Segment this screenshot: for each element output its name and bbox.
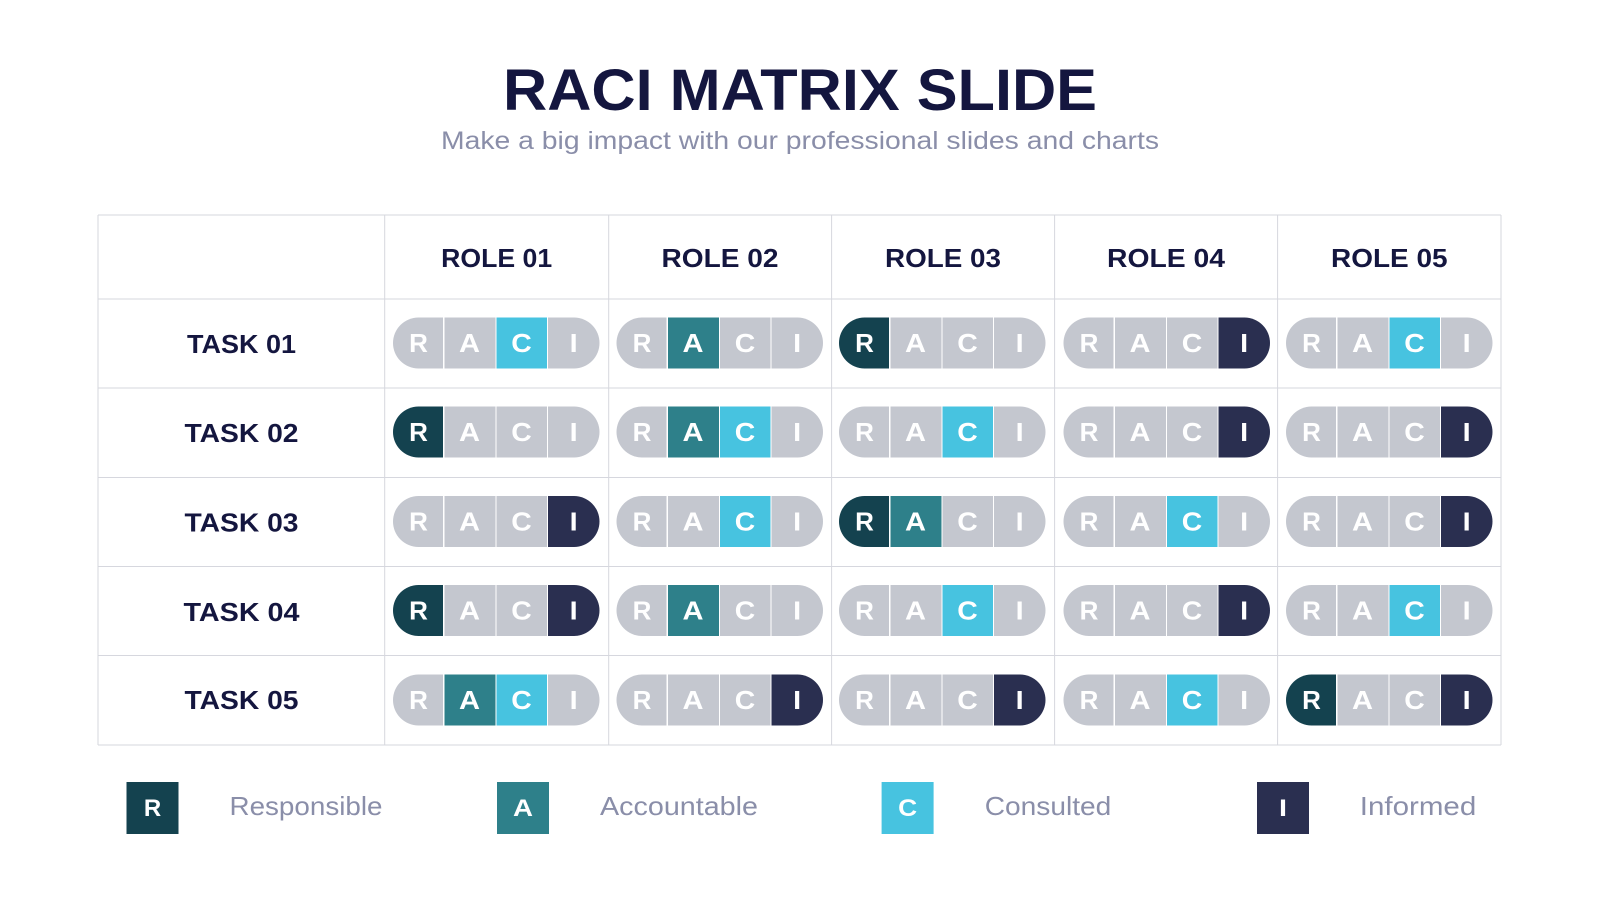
pill: task 03 role 05: C xyxy=(1404,506,1425,536)
pill: task 05 role 04: R xyxy=(1080,685,1099,715)
pill: task 05 role 03 xyxy=(839,674,1046,726)
task labels: TASK 03 xyxy=(184,508,298,538)
pill: task 01 role 02: A xyxy=(682,328,704,358)
pill: task 04 role 02: R xyxy=(633,596,652,626)
pill: task 05 role 05: A xyxy=(1352,685,1373,715)
task labels: TASK 01 xyxy=(187,329,296,359)
pill: task 03 role 03: A xyxy=(905,506,926,536)
pill: task 04 role 04: C xyxy=(1182,596,1202,626)
pill: task 01 role 01 xyxy=(393,318,600,368)
pill: task 05 role 02: R xyxy=(633,685,652,715)
pill: task 04 role 03 xyxy=(839,585,1046,636)
pill: task 05 role 03: A xyxy=(905,685,926,715)
pill: task 05 role 04: A xyxy=(1130,685,1151,715)
pill: task 05 role 05: I xyxy=(1463,685,1471,715)
pill: task 02 role 01 xyxy=(393,406,600,458)
legend: responsible xyxy=(126,782,382,834)
pill: task 02 role 04: A xyxy=(1130,417,1151,447)
pill: task 02 role 01: C xyxy=(511,417,532,447)
pill: task 03 role 04 xyxy=(1064,496,1270,547)
pill: task 02 role 03 xyxy=(839,406,1046,458)
pill: task 03 role 02: A xyxy=(682,506,704,536)
legend: consulted: Consulted xyxy=(985,791,1111,821)
pill: task 02 role 04 xyxy=(1064,406,1270,458)
pill: task 02 role 01: I xyxy=(570,417,578,447)
pill: task 02 role 03: I xyxy=(1016,417,1024,447)
pill: task 05 role 05 xyxy=(1286,674,1492,726)
pill: task 04 role 03: R xyxy=(855,596,874,626)
pill: task 04 role 01 xyxy=(393,585,600,636)
pill: task 02 role 03: C xyxy=(957,417,978,447)
pill: task 04 role 05 xyxy=(1286,585,1492,636)
pill: task 04 role 01: A xyxy=(459,596,480,626)
pill: task 03 role 01: R xyxy=(409,506,428,536)
pill: task 01 role 01: A xyxy=(459,328,480,358)
legend: informed: I xyxy=(1279,795,1287,822)
pill: task 02 role 05: A xyxy=(1352,417,1373,447)
pill: task 02 role 01: A xyxy=(459,417,480,447)
pill: task 01 role 02 xyxy=(616,318,823,368)
pill: task 03 role 02: C xyxy=(735,506,755,536)
legend: informed xyxy=(1257,782,1476,834)
pill: task 05 role 02: C xyxy=(735,685,755,715)
pill: task 03 role 03: R xyxy=(855,506,874,536)
pill: task 01 role 02: C xyxy=(735,328,755,358)
pill: task 02 role 01: R xyxy=(409,417,428,447)
legend: accountable: Accountable xyxy=(600,791,758,821)
pill: task 05 role 03: I xyxy=(1016,685,1024,715)
pill: task 02 role 03: A xyxy=(905,417,926,447)
pill: task 04 role 05: I xyxy=(1463,596,1471,626)
pill: task 01 role 05 xyxy=(1286,318,1492,368)
pill: task 04 role 05: A xyxy=(1352,596,1373,626)
pill: task 05 role 04: C xyxy=(1182,685,1202,715)
pill: task 04 role 02: I xyxy=(793,596,801,626)
role headers: ROLE 01 xyxy=(441,243,552,273)
pill: task 01 role 03: I xyxy=(1016,328,1024,358)
pill: task 05 role 01: I xyxy=(570,685,578,715)
pill: task 03 role 01: I xyxy=(570,506,578,536)
pill: task 02 role 05 xyxy=(1286,406,1492,458)
pill: task 01 role 03: A xyxy=(905,328,926,358)
pill: task 03 role 02: I xyxy=(793,506,801,536)
pill: task 01 role 01: I xyxy=(570,328,578,358)
pill: task 05 role 01: A xyxy=(459,685,480,715)
pill: task 05 role 01: R xyxy=(409,685,428,715)
pill: task 01 role 05: A xyxy=(1352,328,1373,358)
legend: consulted xyxy=(882,782,1111,834)
task labels: TASK 04 xyxy=(184,597,300,627)
role headers: ROLE 05 xyxy=(1331,243,1448,273)
pill: task 04 role 02: A xyxy=(682,596,704,626)
pill: task 02 role 04: C xyxy=(1182,417,1202,447)
pill: task 04 role 05: C xyxy=(1404,596,1425,626)
pill: task 05 role 02: A xyxy=(682,685,704,715)
role headers: ROLE 02 xyxy=(662,243,778,273)
pill: task 01 role 03 xyxy=(839,318,1046,368)
pill: task 02 role 02: A xyxy=(682,417,704,447)
pill: task 05 role 01 xyxy=(393,674,600,726)
pill: task 04 role 04: A xyxy=(1130,596,1151,626)
pill: task 02 role 05: C xyxy=(1404,417,1425,447)
pill: task 01 role 03: R xyxy=(855,328,874,358)
pill: task 03 role 04: C xyxy=(1182,506,1202,536)
pill: task 03 role 03: C xyxy=(957,506,978,536)
task labels xyxy=(184,329,300,715)
pill: task 03 role 05: R xyxy=(1302,506,1321,536)
pill: task 04 role 05: R xyxy=(1302,596,1321,626)
pill: task 02 role 04: I xyxy=(1240,417,1248,447)
pill: task 02 role 02: I xyxy=(793,417,801,447)
pill: task 05 role 04 xyxy=(1064,674,1270,726)
legend: responsible: R xyxy=(144,795,161,822)
legend: consulted: C xyxy=(898,795,917,822)
pill: task 02 role 05: I xyxy=(1463,417,1471,447)
pill: task 03 role 05: A xyxy=(1352,506,1373,536)
pill: task 03 role 03: I xyxy=(1016,506,1024,536)
pill: task 05 role 04: I xyxy=(1240,685,1248,715)
table grid xyxy=(98,215,1501,745)
pill: task 01 role 04 xyxy=(1064,318,1270,368)
pill: task 03 role 04: I xyxy=(1240,506,1248,536)
pill: task 02 role 04: R xyxy=(1080,417,1099,447)
pill: task 02 role 02 xyxy=(616,406,823,458)
pill: task 03 role 01: A xyxy=(459,506,480,536)
pill: task 03 role 01: C xyxy=(511,506,532,536)
pill: task 03 role 05 xyxy=(1286,496,1492,547)
pill: task 01 role 01: C xyxy=(511,328,532,358)
pill: task 01 role 05: R xyxy=(1302,328,1321,358)
pill: task 05 role 05: R xyxy=(1302,685,1321,715)
pill: task 04 role 04: I xyxy=(1240,596,1248,626)
pill: task 01 role 05: I xyxy=(1463,328,1471,358)
pill: task 04 role 01: R xyxy=(409,596,428,626)
pill: task 01 role 02: R xyxy=(633,328,652,358)
pill: task 04 role 01: I xyxy=(570,596,578,626)
pill: task 03 role 03 xyxy=(839,496,1046,547)
pill: task 05 role 03: C xyxy=(957,685,978,715)
pill: task 05 role 02: I xyxy=(793,685,801,715)
role headers: ROLE 03 xyxy=(885,243,1001,273)
pill: task 04 role 02 xyxy=(616,585,823,636)
pill: task 01 role 01: R xyxy=(409,328,428,358)
pill: task 04 role 04 xyxy=(1064,585,1270,636)
pill: task 01 role 04: I xyxy=(1240,328,1248,358)
pill: task 01 role 04: A xyxy=(1130,328,1151,358)
task labels: TASK 05 xyxy=(184,685,298,715)
pill: task 01 role 02: I xyxy=(793,328,801,358)
pill: task 05 role 05: C xyxy=(1404,685,1425,715)
pill: task 02 role 05: R xyxy=(1302,417,1321,447)
pill: task 02 role 02: R xyxy=(633,417,652,447)
pill: task 04 role 01: C xyxy=(511,596,532,626)
title: RACI MATRIX SLIDE xyxy=(503,58,1097,123)
legend: accountable: A xyxy=(513,795,533,822)
subtitle: Make a big impact with our professional slides and charts xyxy=(441,127,1159,155)
legend: responsible: Responsible xyxy=(230,791,382,821)
pill: task 05 role 02 xyxy=(616,674,823,726)
pill: task 03 role 05: I xyxy=(1463,506,1471,536)
pill: task 01 role 05: C xyxy=(1404,328,1425,358)
pill: task 01 role 03: C xyxy=(957,328,978,358)
pill: task 02 role 02: C xyxy=(735,417,755,447)
pill: task 02 role 03: R xyxy=(855,417,874,447)
pill: task 04 role 03: I xyxy=(1016,596,1024,626)
pill: task 01 role 04: C xyxy=(1182,328,1202,358)
pill: task 05 role 01: C xyxy=(511,685,532,715)
pill: task 04 role 04: R xyxy=(1080,596,1099,626)
legend: accountable xyxy=(497,782,758,834)
pill: task 03 role 02 xyxy=(616,496,823,547)
pill: task 04 role 02: C xyxy=(735,596,755,626)
pill: task 04 role 03: C xyxy=(957,596,978,626)
pill: task 03 role 01 xyxy=(393,496,600,547)
pill: task 01 role 04: R xyxy=(1080,328,1099,358)
pill: task 03 role 04: R xyxy=(1080,506,1099,536)
pill: task 03 role 02: R xyxy=(633,506,652,536)
legend: informed: Informed xyxy=(1360,791,1476,821)
task labels: TASK 02 xyxy=(184,418,298,448)
pill: task 03 role 04: A xyxy=(1130,506,1151,536)
pill: task 05 role 03: R xyxy=(855,685,874,715)
pill: task 04 role 03: A xyxy=(905,596,926,626)
role headers xyxy=(441,243,1448,273)
role headers: ROLE 04 xyxy=(1107,243,1226,273)
